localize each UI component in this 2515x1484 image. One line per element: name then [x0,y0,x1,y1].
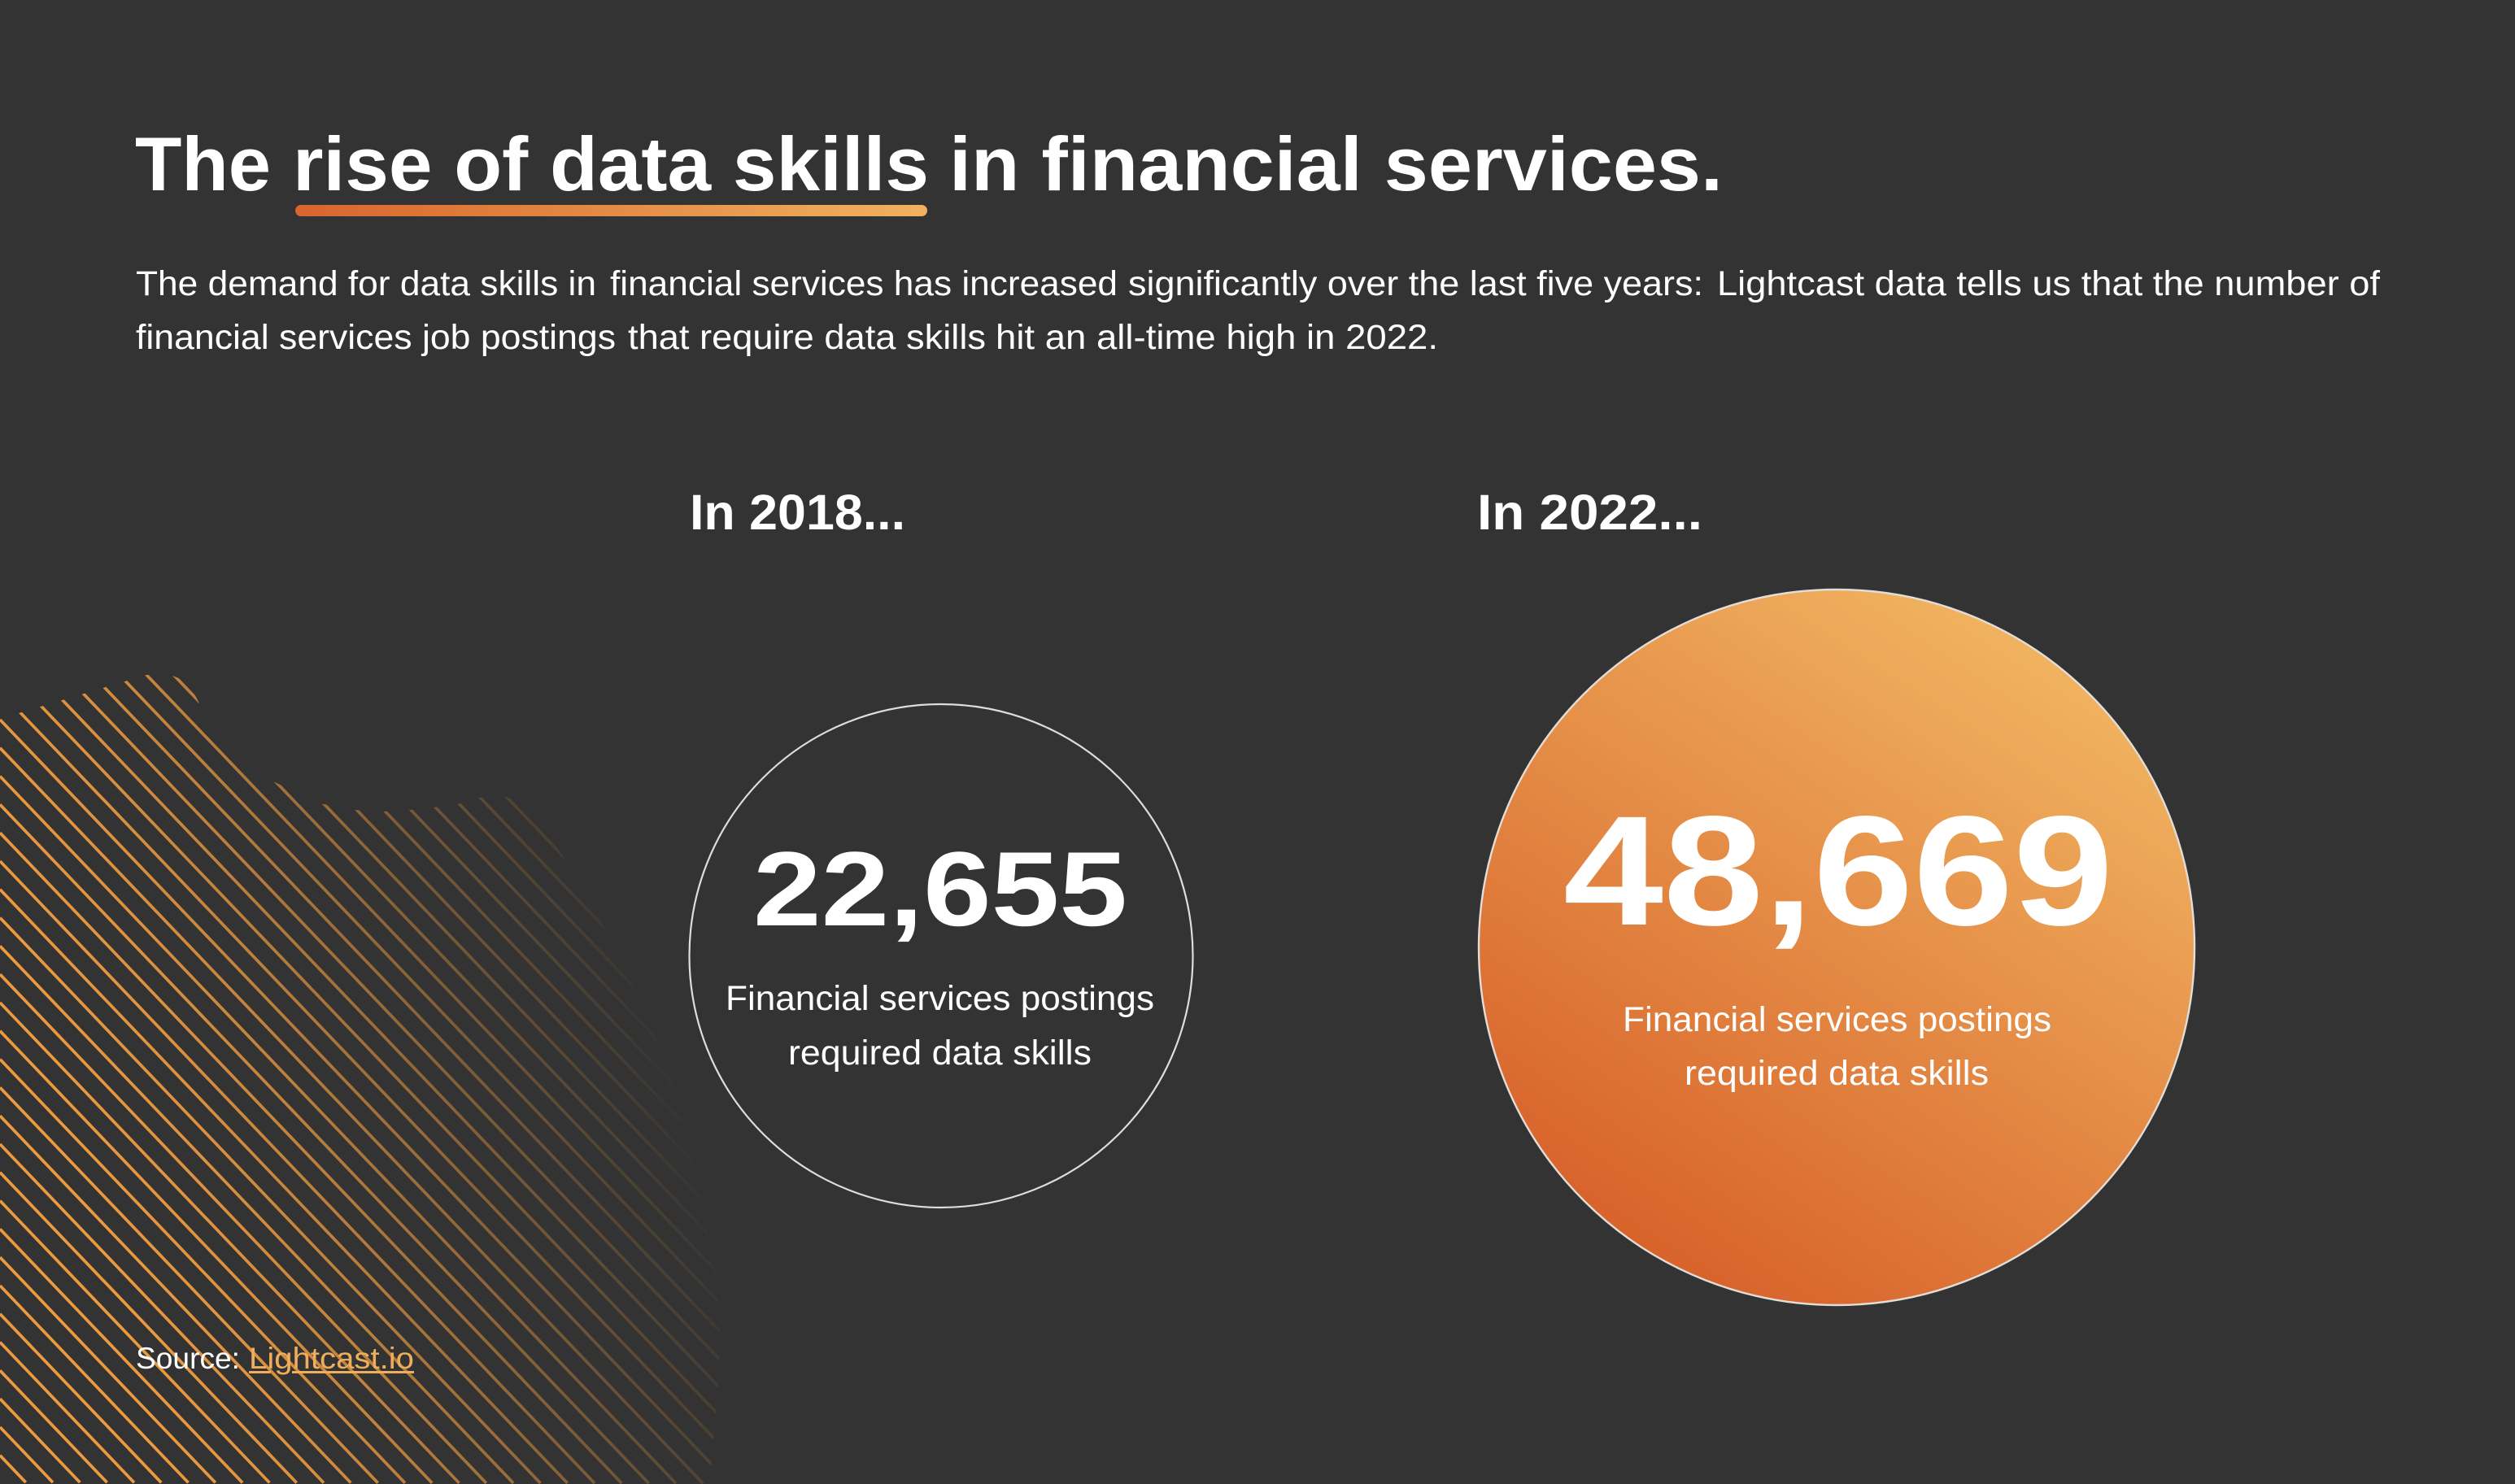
decorative diagonal hatch pattern [0,667,732,1483]
title underline accent [295,205,927,216]
label: 2018 caption: required data skills [788,1034,1092,1073]
intro paragraph: significantly over the last five years: [1128,264,1703,303]
heading: In 2018: In 2018... [690,485,905,540]
stat: 22,655: 22,655 [753,829,1127,948]
title: The [135,121,271,207]
panel: 2022 gradient circle [1479,590,2195,1305]
intro paragraph: The demand for data skills in [136,264,596,303]
panel: 2018 outlined circle [690,704,1192,1208]
intro paragraph: that require data skills [628,318,986,357]
title: rise of data skills [293,121,929,207]
label: 2022 caption: Financial services postings [1623,1000,2051,1039]
title: in financial services. [949,121,1723,207]
intro paragraph: Lightcast data tells us that the number of [1717,264,2381,303]
label: 2022 caption: required data skills [1685,1054,1989,1093]
intro paragraph: financial services job postings [136,318,616,357]
stat: 48,669: 48,669 [1563,783,2113,958]
intro paragraph: financial services has increased [610,264,1118,303]
intro paragraph [136,264,2381,357]
source line: Source: [136,1342,240,1375]
intro paragraph: hit an all-time high in 2022. [996,318,1438,357]
source link: Lightcast.io: Lightcast.io [249,1342,414,1375]
source line [136,1342,414,1375]
label: 2022 caption [1623,1000,2051,1093]
label: 2018 caption [726,979,1154,1073]
heading: In 2022: In 2022... [1477,485,1702,540]
title [135,121,1723,207]
label: 2018 caption: Financial services postings [726,979,1154,1018]
